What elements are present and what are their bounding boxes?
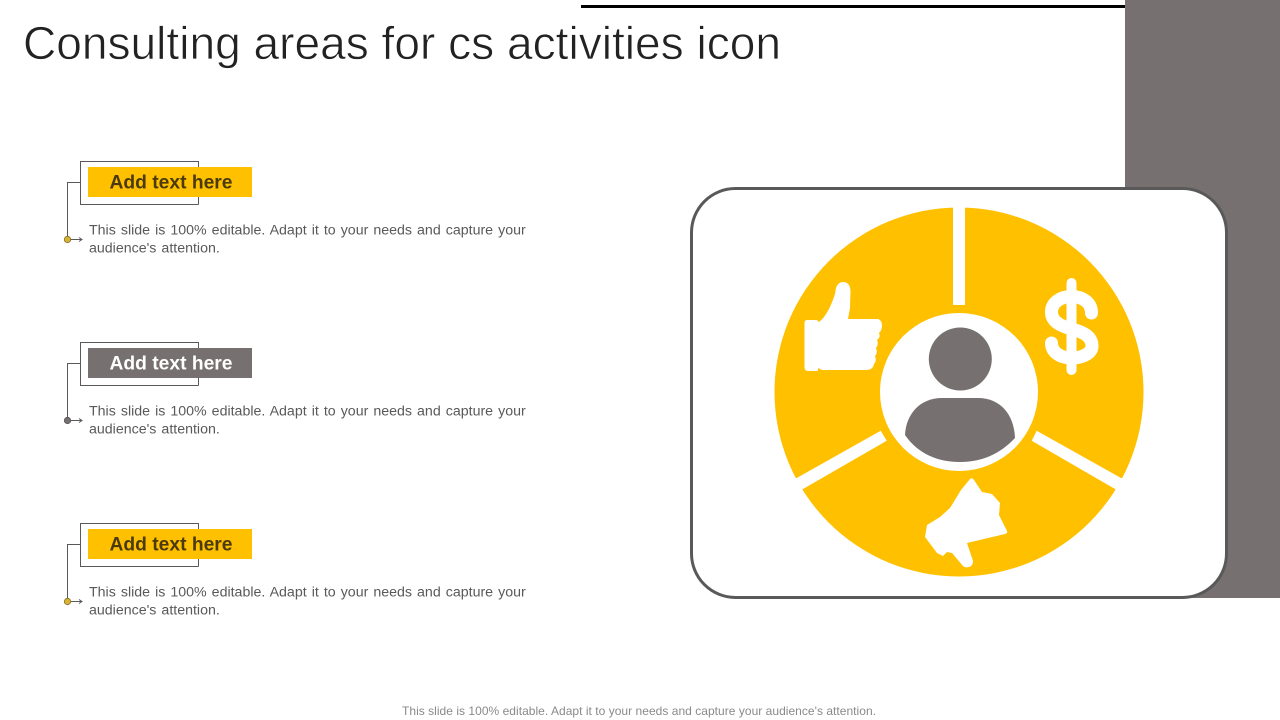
item 3 body text: This slide is 100% editable. Adapt it to your needs and capture your — [89, 584, 526, 600]
item 1 body text — [89, 222, 526, 256]
item 2 heading — [88, 348, 252, 378]
item 3 body text: audience's attention. — [89, 602, 220, 618]
yellow wheel graphic — [774, 200, 1144, 576]
item 3 heading — [88, 529, 252, 559]
item 2 body text — [89, 404, 526, 438]
wheel dividers — [780, 200, 1140, 500]
item 3 marker dot — [64, 598, 71, 605]
item 1 body text: audience's attention. — [89, 240, 220, 256]
icon: person — [905, 328, 1015, 462]
item 2 — [64, 342, 526, 438]
rounded white card — [692, 188, 1226, 598]
grey side panel — [1125, 0, 1280, 598]
centre white circle — [880, 313, 1038, 471]
item 2 heading: Add text here — [110, 354, 232, 374]
item 1 heading: Add text here — [110, 172, 232, 194]
item 1 heading — [88, 167, 252, 197]
item 2 marker dot — [64, 417, 71, 424]
icon: megaphone — [925, 478, 1007, 567]
item 1 marker dot — [64, 236, 71, 243]
item 2 body text: audience's attention. — [89, 422, 220, 438]
item 3 — [64, 524, 526, 618]
item 3 heading: Add text here — [110, 534, 232, 556]
item 2 body text: This slide is 100% editable. Adapt it to your needs and capture your — [89, 404, 526, 420]
title: Consulting areas for cs activities icon — [23, 17, 781, 69]
item 1 outline box and connector — [68, 162, 198, 242]
wheel disc — [774, 208, 1144, 576]
item 3 body text — [89, 584, 526, 618]
icon: dollar sign — [1052, 283, 1092, 370]
item 2 outline box and connector — [68, 342, 198, 422]
item 1 body text: This slide is 100% editable. Adapt it to your needs and capture your — [89, 222, 526, 238]
top black rule — [581, 5, 1125, 8]
item 1 — [64, 162, 526, 256]
item 3 outline box and connector — [68, 524, 198, 604]
footer note: This slide is 100% editable. Adapt it to your needs and capture your audience's attention. — [402, 704, 876, 718]
icon: thumbs up — [804, 282, 882, 371]
